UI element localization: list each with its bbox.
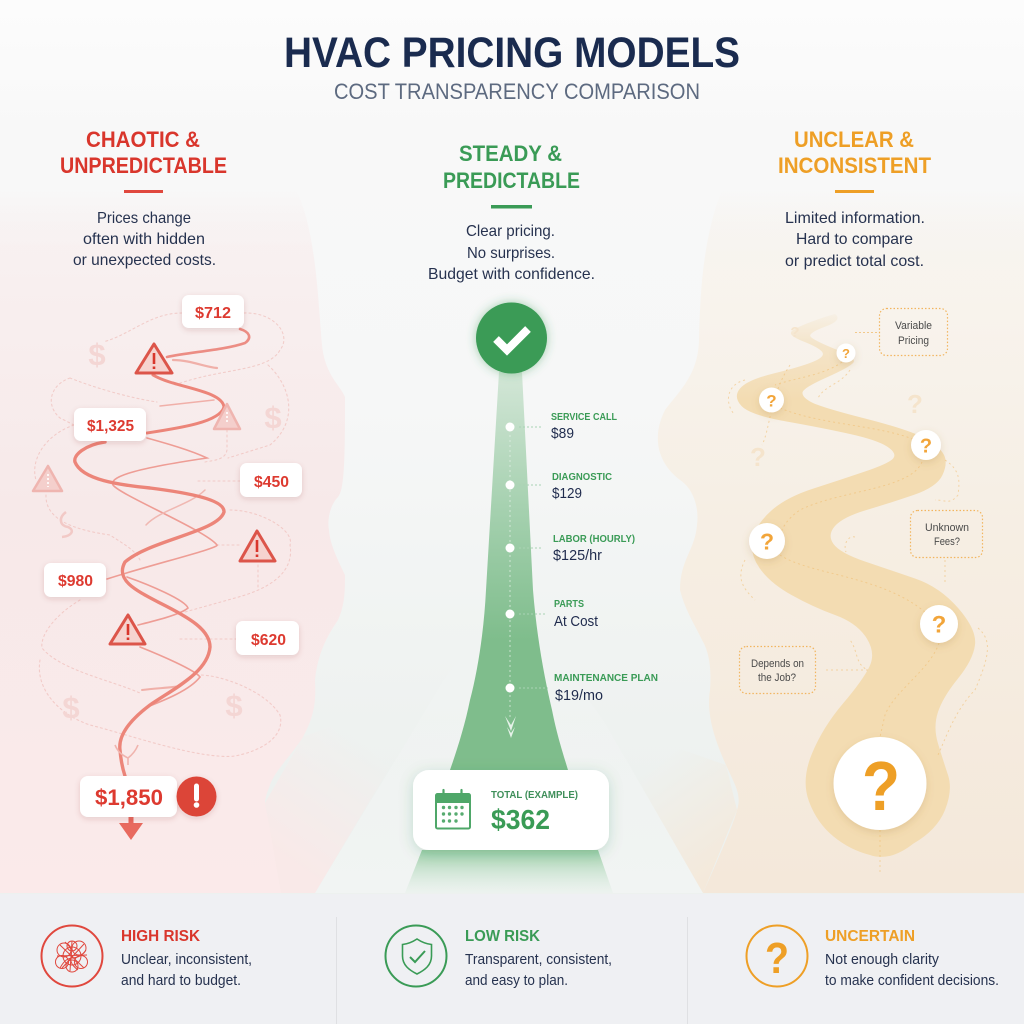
icon: big question [834, 737, 926, 830]
icon: question small [836, 344, 856, 362]
text block: steady description: Budget with confidence. [428, 266, 595, 283]
price tag: $1,850: $1,850 [95, 785, 163, 810]
icon: question middle left: ? [760, 528, 774, 554]
summary: high risk [42, 926, 252, 989]
icons: faint dollar signs: $ [264, 400, 282, 435]
icons: faint dollar signs: $ [225, 688, 243, 723]
callout: unknown fees [910, 510, 982, 558]
item: labor: $125/hr [553, 548, 602, 564]
text block: chaotic description: Prices change [97, 210, 191, 227]
item: service call: $89 [551, 426, 574, 442]
item: parts: PARTS [554, 598, 584, 610]
price tag: $980 [44, 563, 106, 597]
text block: chaotic description [73, 210, 216, 269]
callout: unknown fees: Fees? [934, 536, 960, 548]
icon: alert circle [176, 776, 216, 816]
callout: variable pricing: Variable [895, 320, 932, 332]
icon: check circle [476, 302, 547, 374]
callout: depends on the job [740, 646, 816, 694]
text block: steady description: No surprises. [467, 245, 555, 262]
text block: steady description [428, 223, 595, 283]
callout: depends on the job: the Job? [758, 672, 796, 684]
title: HVAC PRICING MODELS [284, 30, 740, 77]
icons: faint dollar signs: $ [62, 690, 80, 725]
callout: depends on the job: Depends on [751, 658, 804, 670]
heading: chaotic and unpredictable: UNPREDICTABLE [60, 153, 227, 178]
text block: chaotic description: or unexpected costs. [73, 252, 216, 269]
card: total example: TOTAL (EXAMPLE) [491, 789, 578, 801]
icons: faint question marks: ? [790, 324, 800, 341]
icon: faint warning triangle left [33, 466, 62, 491]
summary: high risk: Unclear, inconsistent, [121, 952, 252, 968]
text block: unclear description: Hard to compare [796, 231, 913, 248]
summary: uncertain: UNCERTAIN [825, 928, 915, 945]
heading: unclear and inconsistent [778, 127, 931, 193]
summary: low risk [386, 926, 612, 989]
summary: high risk: HIGH RISK [121, 928, 200, 945]
heading: steady and predictable [443, 141, 580, 208]
price tag: $712 [182, 295, 244, 328]
item: service call [506, 411, 617, 442]
icon: tangled scribble [42, 926, 102, 986]
icon: question lower right [920, 605, 958, 643]
panel: chaotic background shape [0, 190, 440, 893]
icon: warning triangle right [240, 531, 275, 561]
summary: low risk: and easy to plan. [465, 973, 568, 989]
icon: warning triangle top [136, 344, 172, 373]
faint dashed wander lines [35, 313, 291, 756]
item: maintenance plan [506, 672, 658, 704]
dashed route lines [728, 362, 987, 875]
panel: summary band [0, 894, 1024, 1024]
icon: calendar [436, 790, 470, 828]
price tag: $1,325 [74, 408, 146, 441]
icons: faint dollar signs [62, 337, 282, 725]
heading: steady and predictable: PREDICTABLE [443, 168, 580, 193]
summary: low risk: LOW RISK [465, 928, 540, 945]
icon: big question: ? [862, 747, 900, 825]
icon: question upper left [759, 388, 784, 412]
icon: question upper right [911, 430, 941, 460]
heading: steady and predictable: STEADY & [459, 141, 562, 166]
price tag: $450: $450 [254, 474, 289, 491]
icons: faint question marks: ? [907, 389, 923, 419]
price tag: $620 [236, 621, 299, 655]
icon: question circle [746, 926, 808, 986]
callout: variable pricing: Pricing [898, 335, 929, 347]
chart: chaotic price path [35, 313, 291, 776]
chart: steady green road [405, 372, 613, 893]
text block: chaotic description: often with hidden [83, 231, 205, 248]
icon: faint branch marks [115, 745, 138, 765]
panel: unclear background shape [605, 190, 1024, 893]
price tag: $620: $620 [251, 632, 286, 649]
arrow: road down chevrons [505, 716, 516, 738]
icon: question upper right: ? [920, 436, 932, 458]
icon: question middle left [749, 523, 785, 559]
price tag: $1,850 [80, 776, 177, 817]
icon: faint warning triangle [214, 404, 240, 429]
icon: question lower right: ? [932, 612, 946, 638]
icon: faint squiggle [61, 512, 72, 537]
item: parts [506, 598, 598, 630]
card: total example [413, 770, 609, 850]
heading: chaotic and unpredictable: CHAOTIC & [86, 127, 200, 152]
item: parts: At Cost [554, 614, 598, 630]
card: total example: $362 [491, 804, 550, 835]
icons: faint question marks [750, 324, 923, 472]
item: diagnostic: $129 [552, 486, 582, 502]
icon: warning triangle lower [110, 615, 145, 644]
icon: question small: ? [842, 346, 850, 361]
price tag: $712: $712 [195, 305, 231, 322]
summary: high risk: and hard to budget. [121, 973, 241, 989]
text block: steady description: Clear pricing. [466, 223, 555, 240]
summary: uncertain: Not enough clarity [825, 952, 940, 968]
item: service call: SERVICE CALL [551, 411, 617, 423]
chart: winding uncertain road [728, 314, 987, 875]
item: maintenance plan: MAINTENANCE PLAN [554, 672, 658, 684]
summary: uncertain: to make confident decisions. [825, 973, 999, 989]
price tag: $450 [240, 463, 302, 497]
arrow: final price down arrow [119, 817, 143, 840]
icon: question circle: ? [765, 934, 789, 983]
price tag: $1,325: $1,325 [87, 418, 134, 435]
center light lane [315, 590, 703, 893]
summary: low risk: Transparent, consistent, [465, 952, 612, 968]
heading: unclear and inconsistent: UNCLEAR & [794, 127, 914, 152]
heading: chaotic and unpredictable [60, 127, 227, 193]
price tag: $980: $980 [58, 573, 93, 590]
main thick line [167, 329, 249, 357]
item: diagnostic [506, 471, 612, 502]
icons: faint question marks: ? [750, 442, 766, 472]
callout: unknown fees: Unknown [925, 522, 969, 534]
icon: shield check [386, 926, 446, 986]
item: labor [506, 533, 635, 564]
icons: faint dollar signs: $ [88, 337, 106, 372]
callout: variable pricing [855, 308, 948, 356]
heading: unclear and inconsistent: INCONSISTENT [778, 153, 931, 178]
text block: unclear description: Limited information. [785, 210, 925, 227]
item: maintenance plan: $19/mo [555, 688, 603, 704]
item: diagnostic: DIAGNOSTIC [552, 471, 612, 483]
text block: unclear description: or predict total cost. [785, 253, 924, 270]
thin strands [107, 438, 217, 579]
icon: question upper left: ? [766, 392, 777, 410]
item: labor: LABOR (HOURLY) [553, 533, 635, 545]
subtitle: COST TRANSPARENCY COMPARISON [334, 79, 700, 104]
summary: uncertain [746, 926, 999, 989]
text block: unclear description [785, 210, 925, 270]
